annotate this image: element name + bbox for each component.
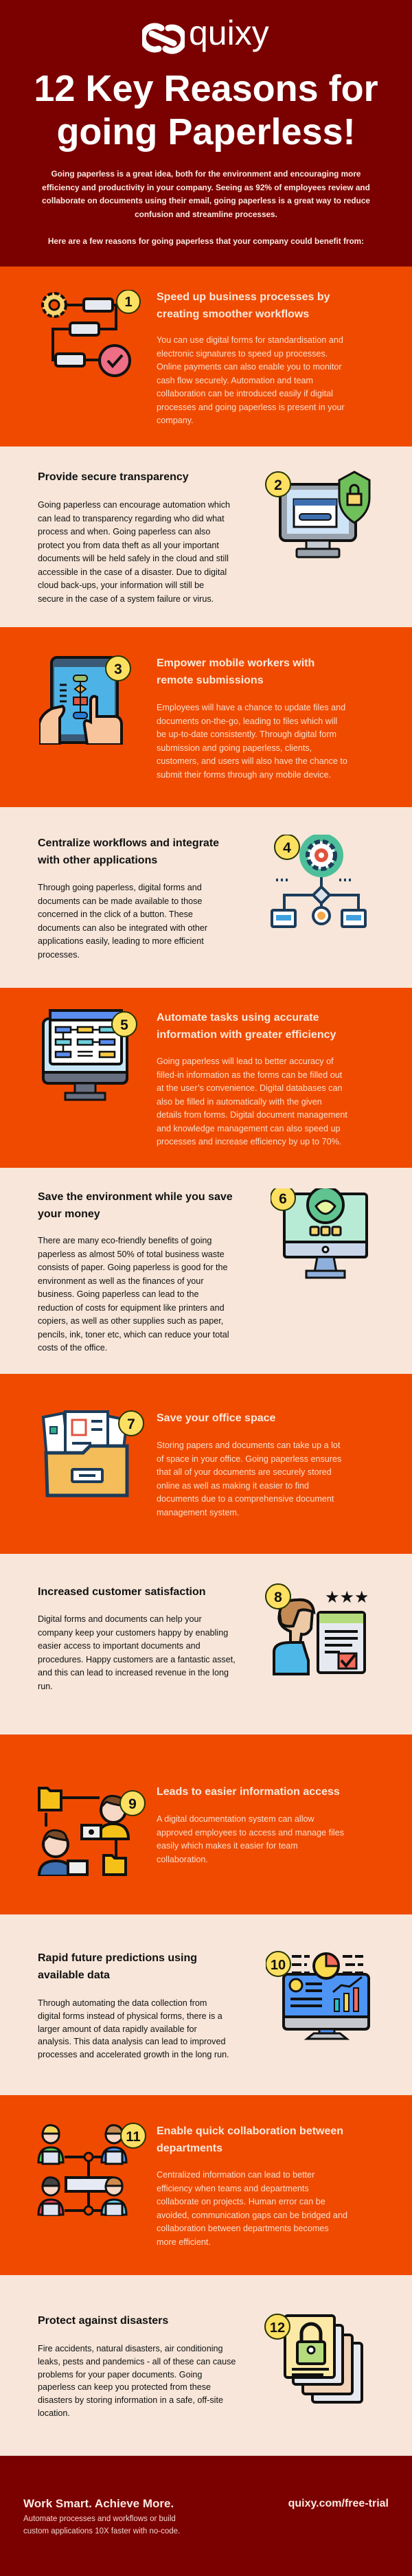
footer subtext bbox=[23, 2515, 180, 2535]
body text bbox=[38, 1614, 236, 1691]
icon: analytics monitor: 10 bbox=[271, 1958, 286, 1973]
heading: with other applications bbox=[38, 855, 157, 866]
body text: cash flow securely. Automation and team bbox=[157, 375, 313, 385]
logo bbox=[142, 14, 269, 54]
body text: collaborate on projects. Human error can be bbox=[157, 2197, 325, 2206]
title: going Paperless! bbox=[56, 111, 356, 152]
body text: Centralized information can lead to better bbox=[157, 2170, 314, 2180]
body text: paperless as almost 50% of total business waste bbox=[38, 1249, 225, 1258]
body text: protect you from data theft as all your important bbox=[38, 540, 219, 550]
body text bbox=[157, 703, 347, 779]
icon: workflow: 1 bbox=[124, 295, 133, 310]
body text: of space in your office. Going paperless ensures bbox=[157, 1454, 341, 1463]
body text: costs of the office. bbox=[38, 1343, 107, 1353]
body text: There are many eco-friendly benefits of going bbox=[38, 1236, 211, 1245]
body text: can lead to transparency regarding who did what bbox=[38, 514, 225, 523]
body text bbox=[38, 883, 207, 959]
body text: efficiency when teams and departments bbox=[157, 2183, 309, 2193]
icon: locked documents bbox=[264, 2314, 363, 2404]
body text: processes and going paperless is present in your bbox=[157, 403, 345, 412]
icon: satisfied customer bbox=[265, 1583, 367, 1675]
body text: documents will be held safely in the cloud and still bbox=[38, 554, 229, 563]
footer subtext: custom applications 10X faster with no-code. bbox=[23, 2527, 180, 2535]
intro lead-in: Here are a few reasons for going paperless that your company could benefit from: bbox=[48, 236, 364, 246]
heading: Centralize workflows and integrate bbox=[38, 837, 219, 849]
panel: reason 7 bbox=[0, 1374, 412, 1554]
heading: information with greater efficiency bbox=[157, 1029, 336, 1040]
footer bbox=[0, 2456, 412, 2576]
icon: departments network: 11 bbox=[126, 2129, 141, 2145]
body text: Digital forms and documents can help your bbox=[38, 1614, 202, 1624]
heading bbox=[157, 291, 330, 320]
body text: documents can be made available to those bbox=[38, 896, 202, 905]
heading: Automate tasks using accurate bbox=[157, 1011, 319, 1024]
body text: procedures. Happy customers are a fantastic asset, bbox=[38, 1654, 236, 1664]
body text: at the user’s convenience. Digital databases can bbox=[157, 1083, 342, 1093]
heading bbox=[38, 1952, 197, 1981]
body text: run. bbox=[38, 1682, 53, 1691]
icon: secure monitor: 2 bbox=[274, 477, 282, 493]
body text: easily which makes it easier for team bbox=[157, 1841, 298, 1851]
body text: easier access to important documents and bbox=[38, 1641, 201, 1651]
icon: secure monitor bbox=[265, 471, 371, 558]
icon: integration gear bbox=[271, 835, 367, 928]
icon: integration gear: 4 bbox=[283, 840, 291, 856]
panel: reason 10 bbox=[0, 1914, 412, 2095]
icon: quixy logo mark bbox=[142, 23, 185, 54]
heading: your money bbox=[38, 1208, 100, 1220]
icon: eco monitor: 6 bbox=[279, 1191, 287, 1207]
body text: company keep your customers happy by enabling bbox=[38, 1628, 228, 1638]
body text: Online payments can also enable you to monitor bbox=[157, 362, 342, 372]
body text bbox=[157, 1814, 344, 1864]
heading bbox=[38, 1191, 233, 1220]
body text: company. bbox=[157, 416, 194, 425]
footer link: quixy.com/free-trial bbox=[288, 2498, 389, 2509]
icon: file folder bbox=[41, 1410, 144, 1498]
icon: eco monitor bbox=[271, 1188, 368, 1279]
intro text: efficiency and productivity in your company. Seeing as 92% of employees review and bbox=[42, 183, 370, 192]
title bbox=[34, 68, 378, 152]
body text: reduction of costs for equipment like printers and bbox=[38, 1302, 225, 1312]
body text: cloud back-ups, your information will still be bbox=[38, 580, 204, 590]
body text bbox=[157, 1440, 341, 1517]
body text: Storing papers and documents can take up a lot bbox=[157, 1440, 340, 1450]
body text: Fire accidents, natural disasters, air conditioning bbox=[38, 2344, 222, 2353]
body text: environment as well as the finances of your bbox=[38, 1276, 204, 1286]
icon: satisfied customer: 8 bbox=[274, 1590, 282, 1605]
body text: online as well as making it easier to find bbox=[157, 1481, 309, 1491]
body text: details from forms. Digital document management bbox=[157, 1110, 347, 1120]
header bbox=[0, 0, 412, 267]
body text: larger amount of data rapidly available for bbox=[38, 2024, 197, 2034]
panel: reason 3 bbox=[0, 627, 412, 807]
body text bbox=[157, 1057, 347, 1146]
body text: problems for your paper documents. Going bbox=[38, 2370, 202, 2380]
panel: reason 8 bbox=[0, 1554, 412, 1735]
body text bbox=[157, 2170, 347, 2246]
icon: people sharing files bbox=[38, 1787, 146, 1876]
heading: Save your office space bbox=[157, 1412, 275, 1423]
footer tagline: Work Smart. Achieve More. bbox=[23, 2497, 174, 2510]
body text bbox=[38, 1998, 229, 2059]
body text: that all of your documents are securely stored bbox=[157, 1467, 332, 1477]
body text: and this can lead to increased revenue in the long bbox=[38, 1668, 229, 1677]
body text: location. bbox=[38, 2408, 70, 2418]
body text: also be filled in automatically with the given bbox=[157, 1096, 322, 1106]
icon: automation monitor: 5 bbox=[120, 1017, 128, 1033]
body text: documents can also be integrated with other bbox=[38, 923, 207, 933]
logo text: quixy bbox=[189, 14, 269, 52]
heading: Increased customer satisfaction bbox=[38, 1585, 206, 1598]
body text: secure in the case of a system failure or virus. bbox=[38, 594, 214, 603]
body text: You can use digital forms for standardisation and bbox=[157, 335, 343, 345]
icon: tablet in hands bbox=[39, 655, 131, 745]
body text: concerned in the click of a button. These bbox=[38, 909, 193, 919]
intro text bbox=[42, 169, 370, 218]
body text: collaboration between departments becomes bbox=[157, 2224, 329, 2233]
body text: customers, and users will also have the chance to bbox=[157, 756, 347, 766]
title: 12 Key Reasons for bbox=[34, 68, 378, 109]
heading: Provide secure transparency bbox=[38, 471, 189, 483]
intro text: Going paperless is a great idea, both for the environment and encouraging more bbox=[51, 169, 360, 179]
body text: copiers, as well as other supplies such as paper, bbox=[38, 1316, 223, 1326]
heading: Protect against disasters bbox=[38, 2315, 168, 2326]
body text bbox=[38, 500, 230, 603]
heading bbox=[157, 2125, 343, 2154]
heading: Empower mobile workers with bbox=[157, 657, 314, 669]
body text: A digital documentation system can allow bbox=[157, 1814, 314, 1824]
body text: analysis. This data analysis can lead to improved bbox=[38, 2037, 225, 2046]
body text: pencils, ink, toner etc, which can reduce your total bbox=[38, 1330, 229, 1340]
body text: Employees will have a chance to update files and bbox=[157, 703, 345, 712]
body text: submit their forms through any mobile device. bbox=[157, 769, 331, 779]
body text: Through automating the data collection from bbox=[38, 1998, 207, 2008]
panel: reason 2 bbox=[0, 447, 412, 627]
icon: automation monitor bbox=[42, 1009, 137, 1100]
body text: Going paperless can encourage automation which bbox=[38, 500, 230, 510]
panel: reason 6 bbox=[0, 1168, 412, 1374]
icon: file folder: 7 bbox=[127, 1416, 135, 1432]
heading: Enable quick collaboration between bbox=[157, 2125, 343, 2136]
heading: Save the environment while you save bbox=[38, 1191, 233, 1202]
heading: departments bbox=[157, 2142, 222, 2154]
footer subtext: Automate processes and workflows or build bbox=[23, 2515, 176, 2523]
body text: business. Going paperless can lead to the bbox=[38, 1289, 199, 1299]
panel: reason 4 bbox=[0, 807, 412, 988]
body text: processes and accelerated growth in the long run. bbox=[38, 2050, 229, 2059]
body text: collaboration. bbox=[157, 1855, 208, 1864]
body text: submission and going paperless, clients, bbox=[157, 743, 312, 753]
icon: tablet in hands: 3 bbox=[114, 662, 122, 677]
heading bbox=[157, 1011, 336, 1040]
heading: Leads to easier information access bbox=[157, 1786, 340, 1797]
intro text: confusion and streamline processes. bbox=[135, 209, 277, 218]
heading bbox=[157, 657, 314, 686]
icon: departments network bbox=[37, 2123, 146, 2216]
heading bbox=[38, 837, 219, 866]
panel: reason 5 bbox=[0, 988, 412, 1168]
body text: Through going paperless, digital forms and bbox=[38, 883, 202, 892]
body text: consists of paper. Going paperless is good for the bbox=[38, 1263, 228, 1272]
body text: documents due to a comprehensive document bbox=[157, 1494, 334, 1504]
icon: locked documents: 12 bbox=[270, 2320, 285, 2336]
icon: workflow bbox=[41, 290, 141, 377]
heading: remote submissions bbox=[157, 675, 264, 686]
body text: disasters by storing information in a safe, off-site bbox=[38, 2395, 223, 2405]
body text bbox=[38, 2344, 236, 2418]
body text: process and when. Going paperless can also bbox=[38, 527, 210, 536]
panel: reason 1 bbox=[0, 267, 412, 447]
panel: reason 11 bbox=[0, 2095, 412, 2275]
heading: available data bbox=[38, 1969, 110, 1981]
body text: avoided, communication gaps can be bridged and bbox=[157, 2211, 347, 2220]
body text bbox=[157, 335, 345, 425]
body text bbox=[38, 1236, 229, 1353]
intro text: collaborate on documents using their email, going paperless is a great way to reduce bbox=[42, 196, 370, 205]
panel: reason 9 bbox=[0, 1735, 412, 1914]
icon: people sharing files: 9 bbox=[128, 1796, 137, 1812]
body text: documents on-the-go, leading to files which will bbox=[157, 716, 337, 725]
heading: Speed up business processes by bbox=[157, 291, 330, 303]
body text: and knowledge management can also speed up bbox=[157, 1124, 340, 1133]
body text: approved employees to access and manage files bbox=[157, 1827, 344, 1837]
body text: be up-to-date consistently. Through digital form bbox=[157, 730, 336, 739]
body text: accessible in the case of a disaster. Due to digital bbox=[38, 567, 227, 577]
body text: filled-in information as the forms can be filled out bbox=[157, 1070, 342, 1080]
body text: management system. bbox=[157, 1507, 239, 1517]
body text: more efficient. bbox=[157, 2237, 211, 2246]
body text: electronic signatures to speed up processes. bbox=[157, 349, 328, 359]
body text: applications easily, leading to more efficient bbox=[38, 936, 204, 946]
icon: analytics monitor bbox=[266, 1951, 370, 2040]
panel: reason 12 bbox=[0, 2275, 412, 2456]
heading: creating smoother workflows bbox=[157, 308, 309, 320]
heading: Rapid future predictions using bbox=[38, 1952, 197, 1963]
body text: digital forms instead of physical forms, there is a bbox=[38, 2011, 222, 2021]
body text: processes and increase efficiency by up to 70%. bbox=[157, 1137, 341, 1146]
body text: Going paperless will lead to better accuracy of bbox=[157, 1057, 334, 1066]
body text: leaks, pests and pandemics - all of these can cause bbox=[38, 2357, 236, 2366]
body text: paperless can keep you protected from these bbox=[38, 2382, 211, 2392]
body text: processes. bbox=[38, 949, 80, 959]
body text: collaboration can be introduced easily if digital bbox=[157, 389, 333, 398]
